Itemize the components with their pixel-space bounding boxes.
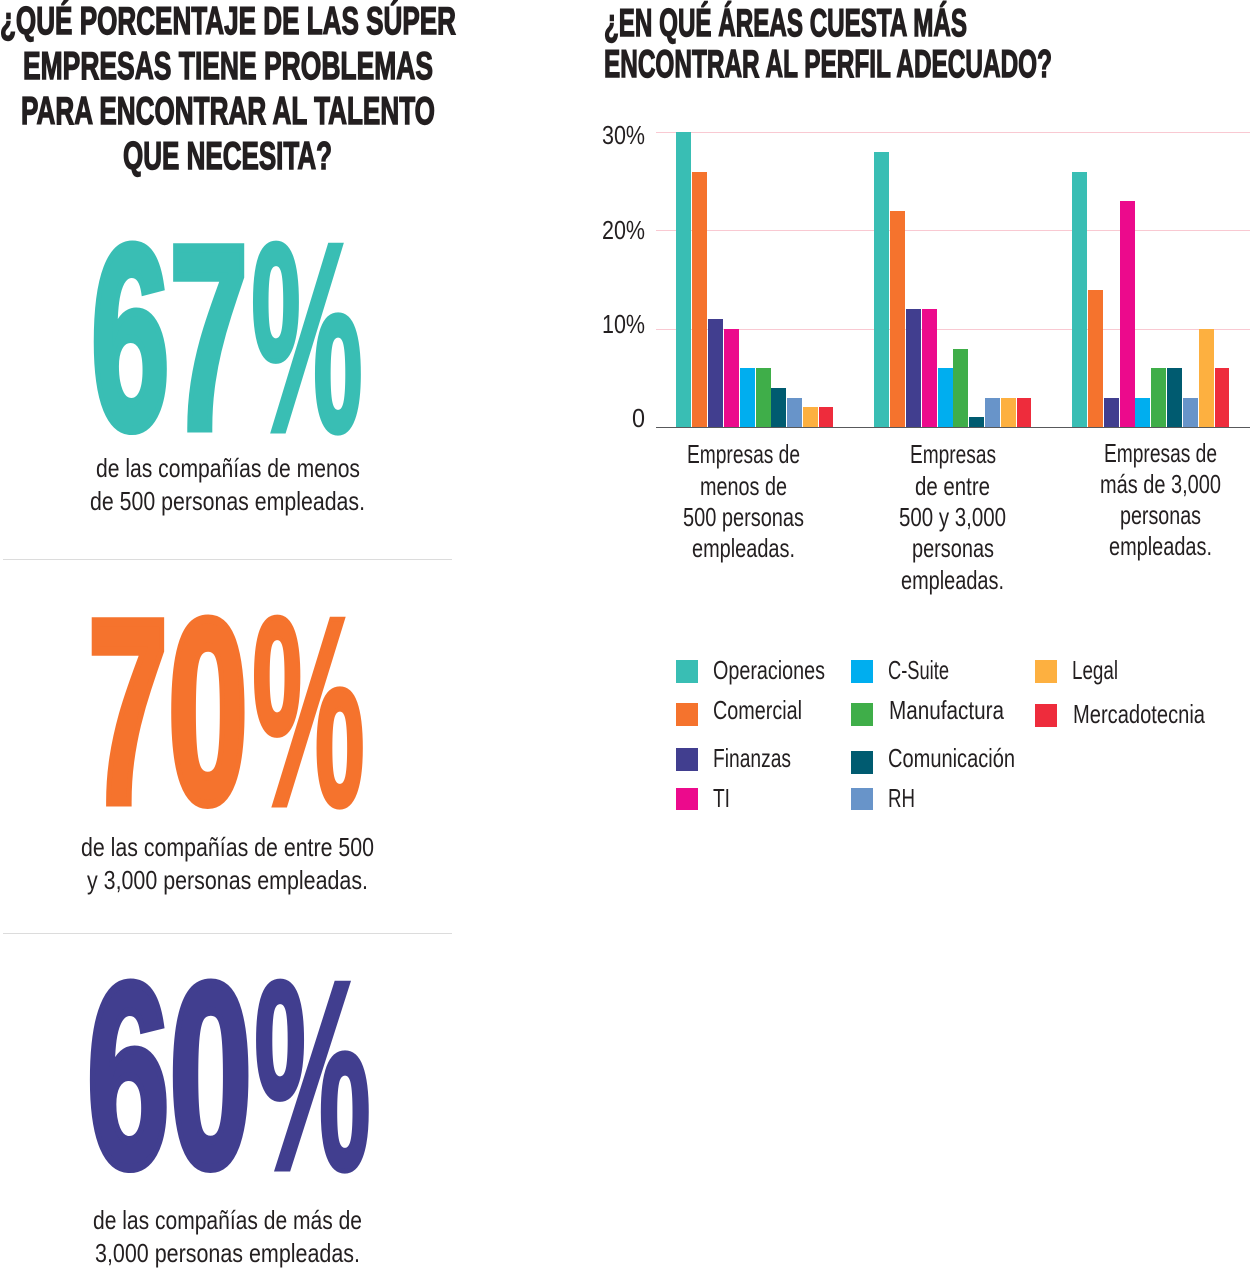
- text: 67 percent description: de las compañías de menos: [96, 453, 360, 483]
- bars: under 500 employees: [676, 132, 833, 427]
- text: 67 percent description: de 500 personas empleadas.: [90, 486, 365, 516]
- panel: left percentages: %: [254, 926, 371, 1227]
- heading: right question: [604, 1, 1052, 86]
- y axis labels: 0: [632, 403, 645, 433]
- heading: left question: [0, 0, 456, 178]
- category label: 500 to 3000: empleadas.: [901, 565, 1004, 595]
- text: 60 percent description: de las compañías de más de: [93, 1205, 362, 1235]
- bar chart: hardest areas by company size: [602, 120, 1250, 595]
- category label: 500 to 3000: Empresas: [910, 439, 996, 469]
- stat: 70 percent: 70: [88, 565, 248, 858]
- legend: Finanzas: [713, 743, 791, 773]
- category label: under 500: Empresas de: [687, 439, 800, 469]
- bars: over 3000 employees: [1072, 172, 1229, 427]
- legend: TI: [713, 783, 730, 813]
- bars: 500 to 3000 employees: [874, 152, 1031, 427]
- text: 60 percent description: 3,000 personas empleadas.: [95, 1238, 360, 1268]
- category label: 500 to 3000: de entre: [915, 471, 990, 501]
- text: 67 percent description: [90, 453, 365, 516]
- legend: RH: [888, 783, 915, 813]
- legend: Comercial: [713, 695, 802, 725]
- legend: Manufactura: [889, 695, 1004, 725]
- heading: right question: ¿EN QUÉ ÁREAS CUESTA MÁS: [604, 1, 967, 45]
- category label: over 3000: personas: [1120, 500, 1201, 530]
- y axis labels: 20%: [602, 215, 645, 245]
- panel: left percentages: %: [251, 188, 363, 489]
- category label: over 3000: empleadas.: [1109, 531, 1212, 561]
- category label: 500 to 3000: personas: [912, 533, 994, 563]
- text: 60 percent description: [93, 1205, 362, 1268]
- legend: Legal: [1072, 655, 1118, 685]
- legend: [676, 655, 1205, 813]
- text: 70 percent description: de las compañías de entre 500: [81, 832, 374, 862]
- panel: left percentages: [0, 0, 456, 1268]
- heading: left question: ¿QUÉ PORCENTAJE DE LAS SÚPER: [0, 0, 456, 43]
- stat: 67 percent: 67: [91, 191, 248, 484]
- legend: Operaciones: [713, 655, 825, 685]
- category label: under 500: empleadas.: [692, 533, 795, 563]
- panel: left percentages: %: [252, 562, 365, 863]
- text: 70 percent description: [81, 832, 374, 895]
- category label: 500 to 3000: 500 y 3,000: [899, 502, 1006, 532]
- y axis labels: 10%: [602, 309, 645, 339]
- heading: left question: EMPRESAS TIENE PROBLEMAS: [23, 45, 433, 88]
- category label: under 500: [683, 439, 804, 563]
- category label: under 500: menos de: [700, 471, 787, 501]
- text: 70 percent description: y 3,000 personas empleadas.: [87, 865, 368, 895]
- category label: 500 to 3000: [899, 439, 1006, 595]
- category label: over 3000: [1100, 438, 1221, 561]
- legend: Mercadotecnia: [1073, 699, 1205, 729]
- y axis labels: [602, 120, 645, 433]
- heading: left question: QUE NECESITA?: [123, 135, 332, 178]
- heading: left question: PARA ENCONTRAR AL TALENTO: [21, 90, 435, 133]
- legend: C-Suite: [888, 655, 949, 685]
- legend: Comunicación: [888, 743, 1015, 773]
- category label: under 500: 500 personas: [683, 502, 804, 532]
- stat: 60 percent: 60: [87, 929, 252, 1222]
- y axis labels: 30%: [602, 120, 645, 150]
